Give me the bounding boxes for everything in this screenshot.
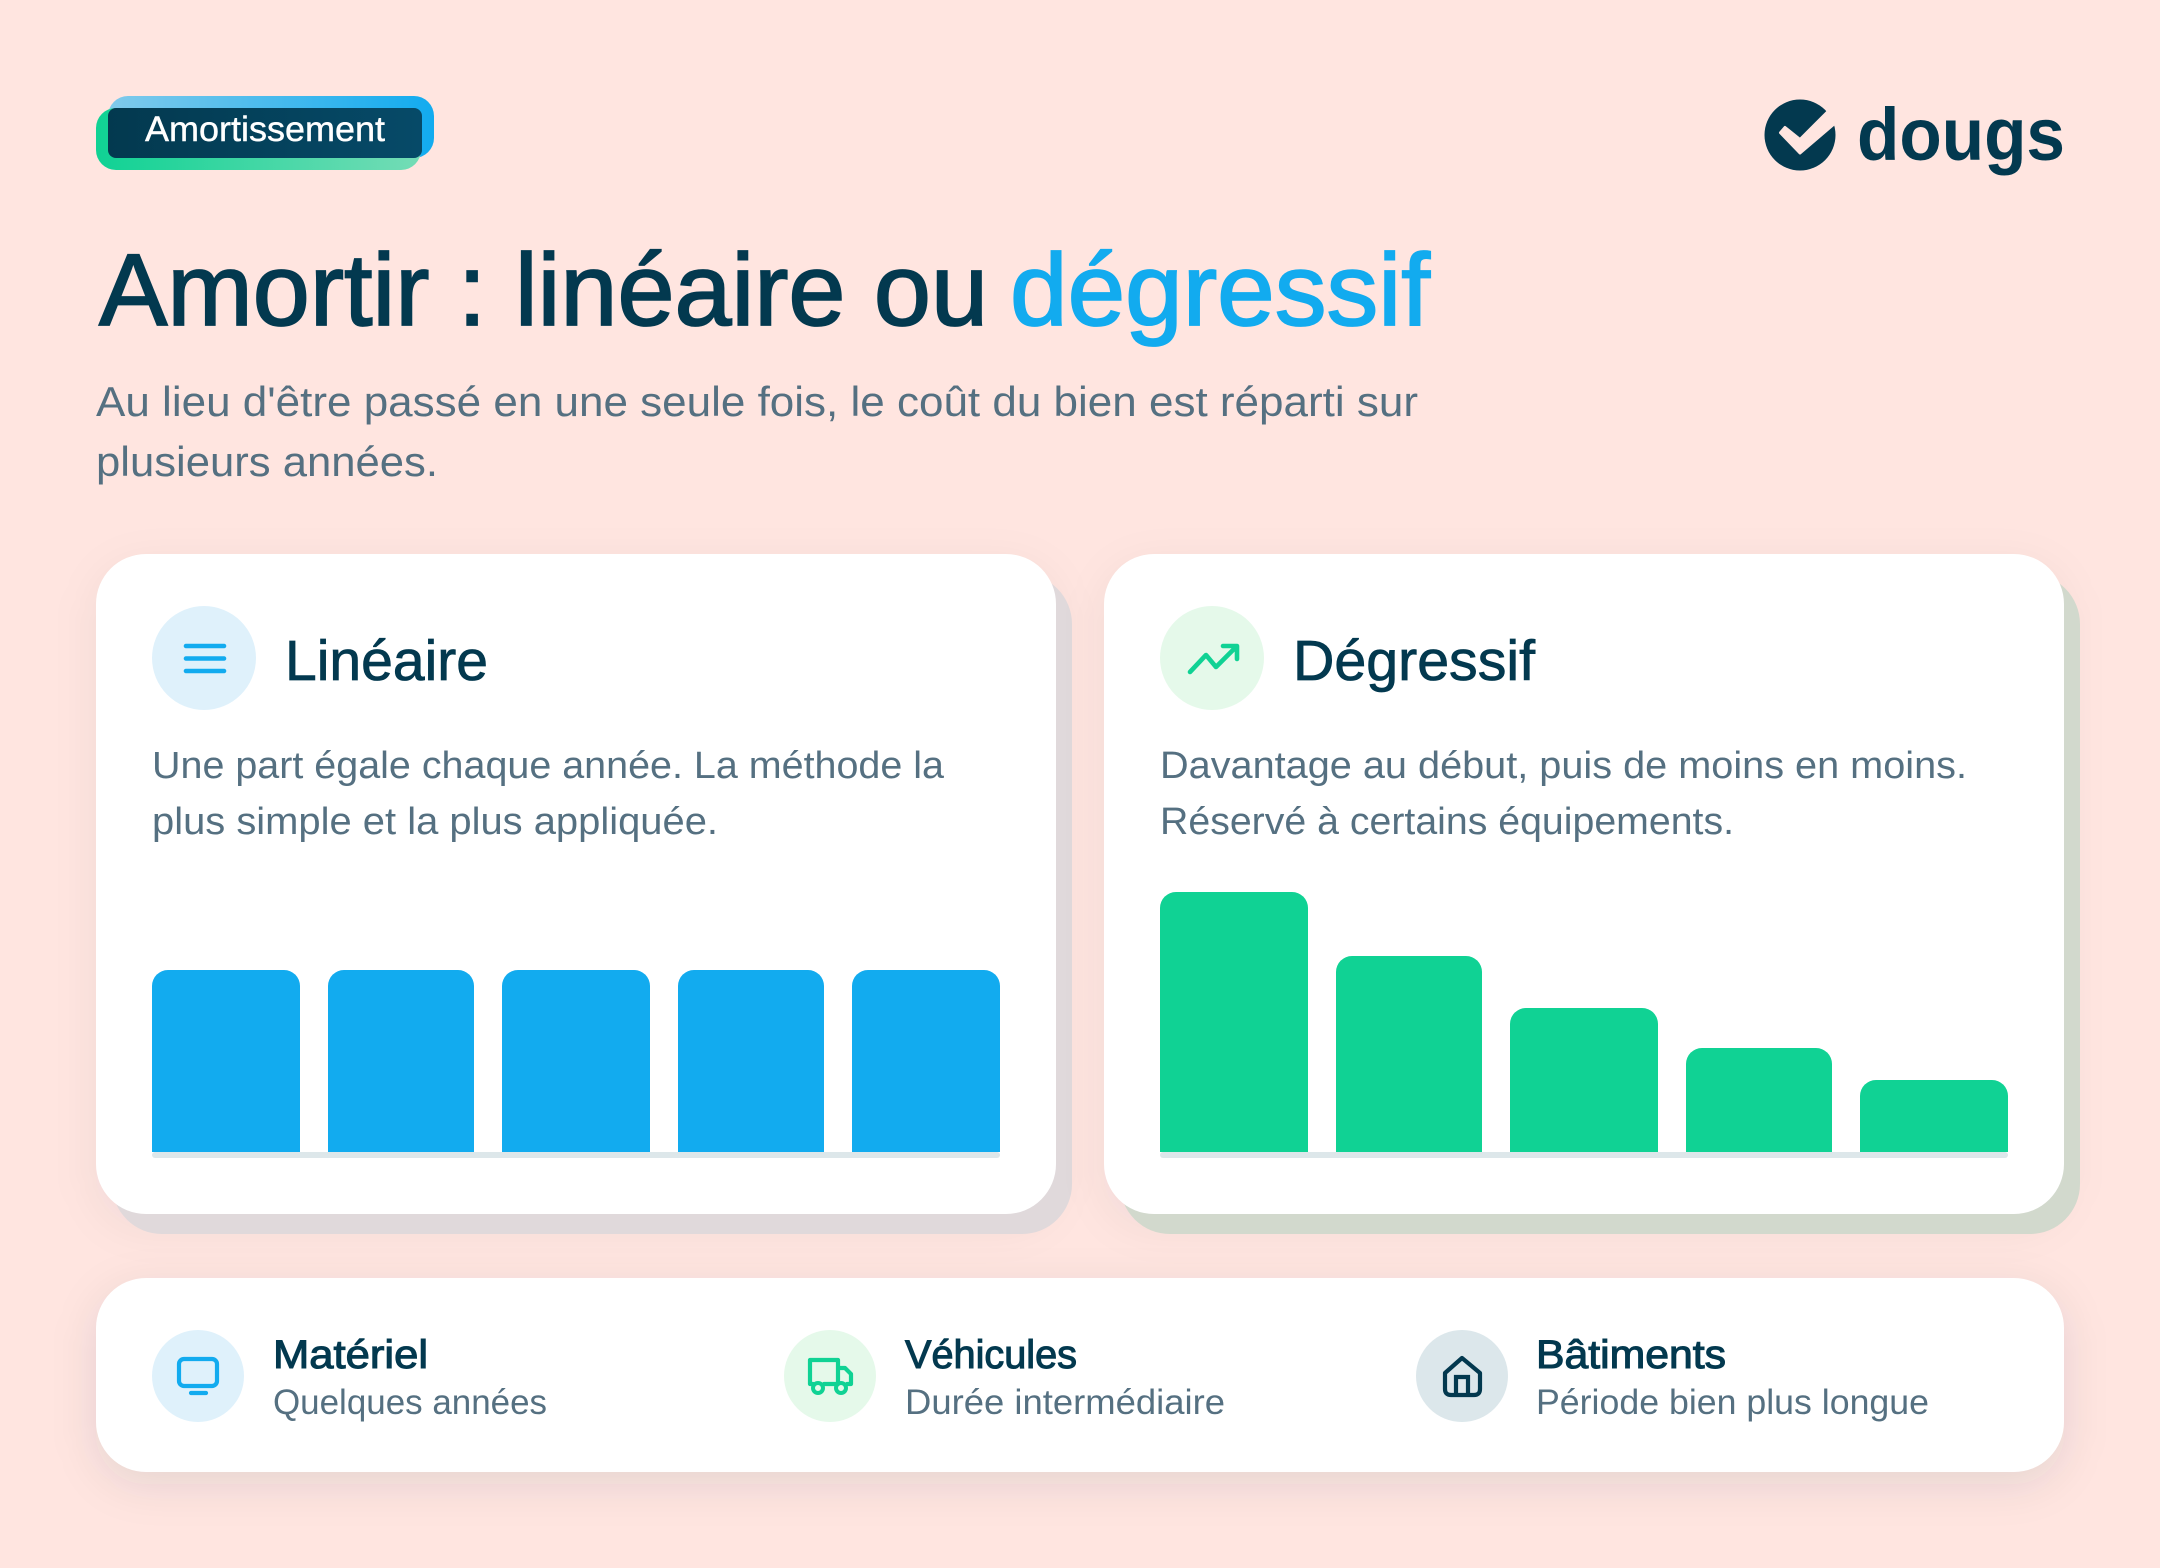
item: Bâtiments — [1416, 1330, 1929, 1422]
title — [99, 233, 1431, 347]
panel: Linéaire — [96, 554, 1072, 1234]
logo: dougs: dougs — [1857, 93, 2065, 176]
icon: truck — [784, 1330, 876, 1422]
sublabel: Période bien plus longue: Période bien plus longue — [1536, 1383, 1929, 1422]
sublabel: Quelques années: Quelques années — [273, 1383, 547, 1422]
badge: Amortissement — [96, 96, 434, 170]
heading: Linéaire: Linéaire — [285, 629, 488, 693]
description: Dégressif: Réservé à certains équipements. — [1160, 801, 1734, 843]
label: Véhicules: Véhicules — [905, 1333, 1077, 1377]
logo: dougs — [1764, 93, 2065, 176]
description: Dégressif — [1160, 745, 1967, 843]
label: Bâtiments: Bâtiments — [1536, 1333, 1726, 1377]
subtitle: plusieurs années. — [96, 438, 438, 485]
label: Matériel: Matériel — [273, 1333, 428, 1377]
item: Matériel — [152, 1330, 547, 1422]
icon: house — [1416, 1330, 1508, 1422]
subtitle — [96, 378, 1418, 485]
item: Véhicules — [784, 1330, 1225, 1422]
subtitle: Au lieu d'être passé en une seule fois, le coût du bien est réparti sur — [96, 378, 1418, 425]
icon: trend arrow — [1160, 606, 1264, 710]
description: Linéaire: Une part égale chaque année. La méthode la — [152, 745, 945, 787]
panel: asset categories — [96, 1278, 2064, 1484]
bar chart: decreasing bars — [1160, 892, 2008, 1158]
sublabel: Durée intermédiaire: Durée intermédiaire — [905, 1383, 1225, 1422]
bar chart: equal bars — [152, 970, 1000, 1158]
title: dégressif — [1010, 233, 1431, 347]
description: Linéaire: plus simple et la plus appliquée. — [152, 801, 718, 843]
panel: Dégressif — [1104, 554, 2080, 1234]
title: Amortir : linéaire ou — [99, 233, 988, 347]
description: Dégressif: Davantage au début, puis de moins en moins. — [1160, 745, 1967, 787]
badge: Amortissement: Amortissement — [145, 110, 385, 149]
heading: Dégressif: Dégressif — [1293, 629, 1535, 693]
icon: lines — [152, 606, 256, 710]
description: Linéaire — [152, 745, 945, 843]
icon: monitor — [152, 1330, 244, 1422]
